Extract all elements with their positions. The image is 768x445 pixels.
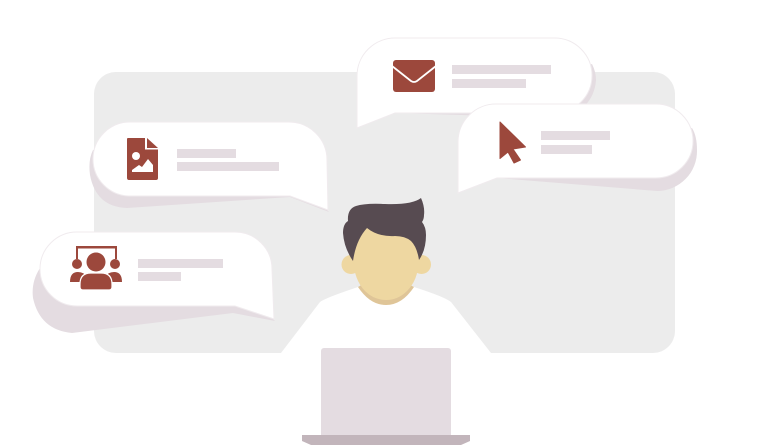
person — [281, 198, 491, 445]
laptop base — [302, 435, 470, 445]
text placeholder lines — [138, 259, 223, 281]
hair — [343, 198, 426, 261]
text placeholder lines — [541, 131, 610, 154]
text placeholder lines — [177, 149, 279, 171]
right ear — [412, 255, 431, 274]
left ear — [342, 255, 360, 274]
laptop — [302, 348, 470, 445]
background panel — [94, 72, 675, 353]
speech bubble: email — [357, 38, 596, 128]
neck shadow — [358, 280, 414, 305]
speech bubble: image file — [89, 122, 329, 212]
icon: presenter with audience — [70, 246, 122, 290]
laptop screen — [321, 348, 451, 438]
speech bubble: presentation audience — [33, 232, 275, 333]
icon: mouse pointer — [500, 122, 526, 163]
white shirt — [281, 287, 491, 445]
icon: image document — [127, 138, 158, 180]
icon: envelope — [392, 60, 436, 92]
face — [353, 226, 418, 300]
speech bubble: cursor — [458, 104, 697, 193]
text placeholder lines — [452, 65, 551, 88]
